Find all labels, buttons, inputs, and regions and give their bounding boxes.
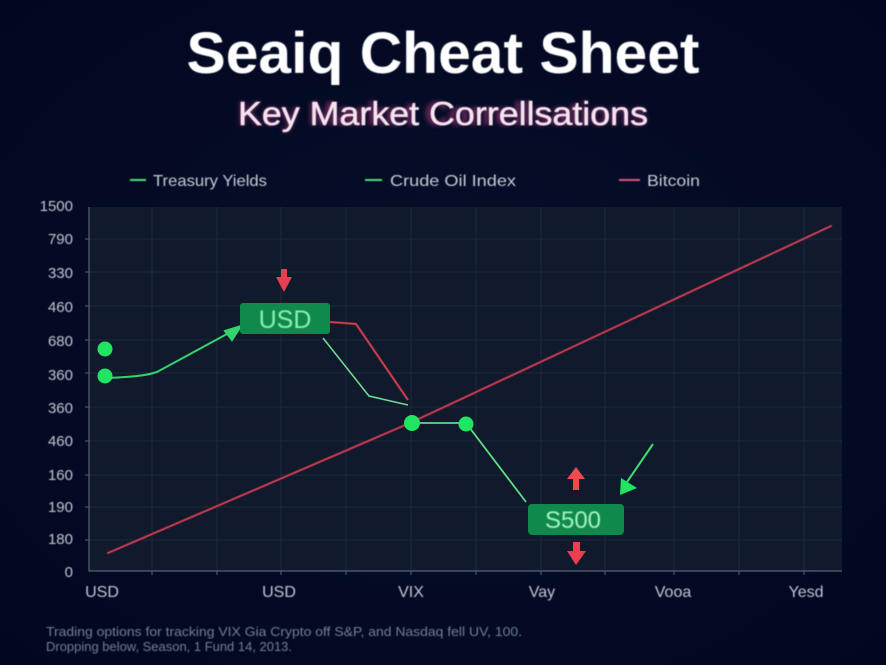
legend item: Bitcoin: Bitcoin xyxy=(647,173,700,190)
y axis labels: 1500 xyxy=(40,198,73,215)
green line: fall from USD xyxy=(323,338,408,405)
x axis labels: USD xyxy=(85,584,119,601)
x axis labels xyxy=(85,584,824,601)
x axis labels: Vay xyxy=(529,584,555,601)
y axis labels: 790 xyxy=(48,231,73,248)
subtitle: Key Market Correllsations xyxy=(238,95,648,132)
S500 label: S500 xyxy=(545,507,601,534)
red line: USD to junction xyxy=(330,322,408,400)
footnote xyxy=(46,624,522,654)
USD label: USD xyxy=(259,306,311,334)
y axis labels xyxy=(40,198,73,581)
title: Seaiq Cheat Sheet xyxy=(186,21,700,86)
legend item: Crude Oil Index: Crude Oil Index xyxy=(390,173,516,190)
y axis labels: 360 xyxy=(48,400,73,417)
y axis labels: 680 xyxy=(48,333,73,350)
y axis labels: 0 xyxy=(65,564,73,581)
legend item: Bitcoin xyxy=(619,173,700,190)
icon: red down arrow below S500 xyxy=(567,542,586,565)
y axis labels: 330 xyxy=(48,265,73,282)
icon: red up arrow above S500 xyxy=(567,467,585,490)
footnote: Trading options for tracking VIX Gia Crypto off S&P, and Nasdaq fell UV, 100. xyxy=(46,624,522,639)
footnote: Dropping below, Season, 1 Fund 14, 2013. xyxy=(46,639,292,654)
x axis labels: USD xyxy=(262,584,296,601)
green data points xyxy=(98,342,474,432)
icon: green arrow pointing to S500 xyxy=(620,444,653,495)
x axis labels: VIX xyxy=(398,584,424,601)
x axis labels: Vooa xyxy=(655,584,691,601)
subtitle: Key Market Correllsations xyxy=(238,95,648,132)
chart plot area xyxy=(85,207,842,575)
green line: junction to S500 xyxy=(412,423,526,502)
y axis labels: 190 xyxy=(48,499,73,516)
S500 label xyxy=(528,504,624,535)
legend xyxy=(130,173,700,190)
icon: red down arrow above USD xyxy=(276,269,292,292)
y axis labels: 360 xyxy=(48,367,73,384)
x axis labels: Yesd xyxy=(788,584,824,601)
y axis labels: 180 xyxy=(48,531,73,548)
legend item: Treasury Yields: Treasury Yields xyxy=(153,173,267,190)
bitcoin trend line xyxy=(108,226,831,553)
y axis labels: 460 xyxy=(48,433,73,450)
USD label xyxy=(240,303,330,334)
y axis labels: 160 xyxy=(48,467,73,484)
y axis labels: 460 xyxy=(48,299,73,316)
green line: treasury rise with arrow xyxy=(106,326,241,378)
